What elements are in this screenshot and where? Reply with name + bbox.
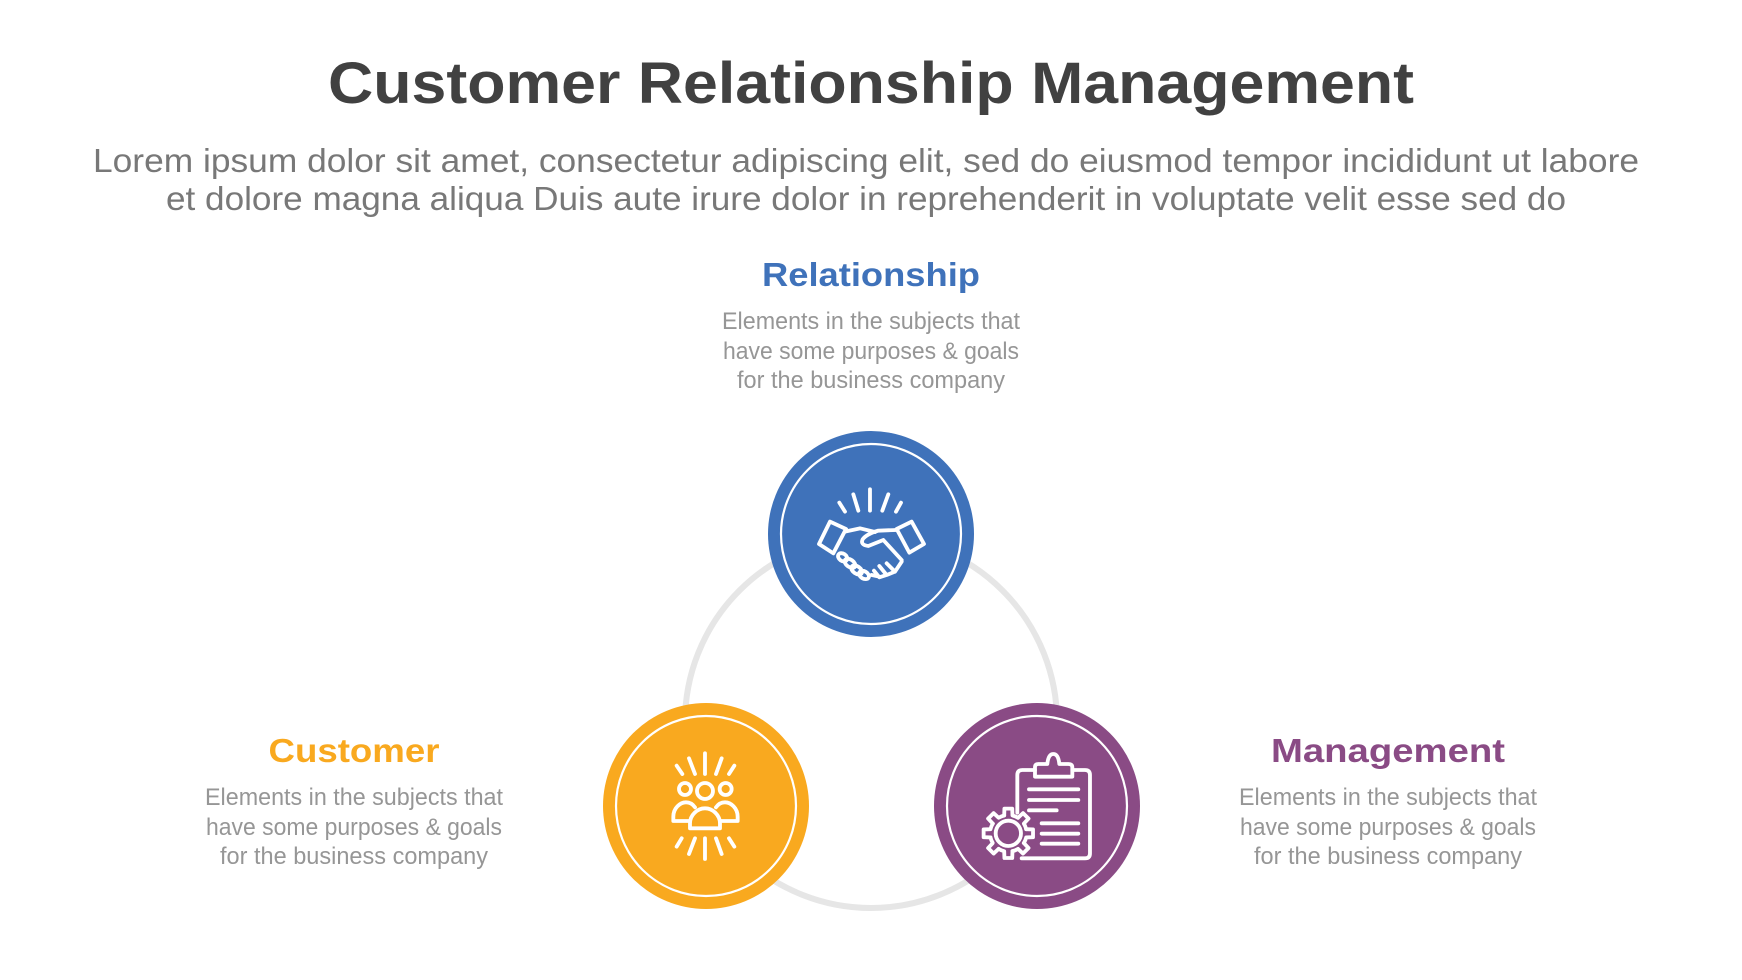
- description: relationship: [722, 308, 1020, 394]
- icon: people group: [673, 753, 738, 859]
- description: relationship: have some purposes & goals: [723, 338, 1019, 365]
- description: customer: have some purposes & goals: [206, 814, 502, 841]
- description: management: for the business company: [1254, 843, 1523, 870]
- panel: customer text: [205, 732, 503, 870]
- connecting ring: [685, 536, 1057, 908]
- heading: management: Management: [1271, 732, 1505, 769]
- node: management circle: [934, 703, 1140, 909]
- node: customer circle: [603, 703, 809, 909]
- subtitle: [93, 142, 1639, 217]
- icon: clipboard and gear: [984, 754, 1090, 858]
- description: customer: for the business company: [220, 843, 489, 870]
- panel: relationship text: [722, 256, 1020, 394]
- panel: management text: [1239, 732, 1537, 870]
- description: customer: Elements in the subjects that: [205, 784, 503, 811]
- subtitle: Lorem ipsum dolor sit amet, consectetur adipiscing elit, sed do eiusmod tempor incididunt ut labore: [93, 142, 1639, 179]
- title: Customer Relationship Management: [328, 51, 1414, 116]
- description: management: Elements in the subjects that: [1239, 784, 1537, 811]
- subtitle: et dolore magna aliqua Duis aute irure dolor in reprehenderit in voluptate velit esse sed do: [166, 180, 1566, 217]
- description: management: have some purposes & goals: [1240, 814, 1536, 841]
- description: relationship: for the business company: [737, 367, 1006, 394]
- node: relationship circle: [768, 431, 974, 637]
- description: relationship: Elements in the subjects that: [722, 308, 1020, 335]
- description: management: [1239, 784, 1537, 870]
- icon: handshake: [819, 489, 924, 581]
- heading: customer: Customer: [268, 732, 440, 769]
- description: customer: [205, 784, 503, 870]
- heading: relationship: Relationship: [762, 256, 980, 293]
